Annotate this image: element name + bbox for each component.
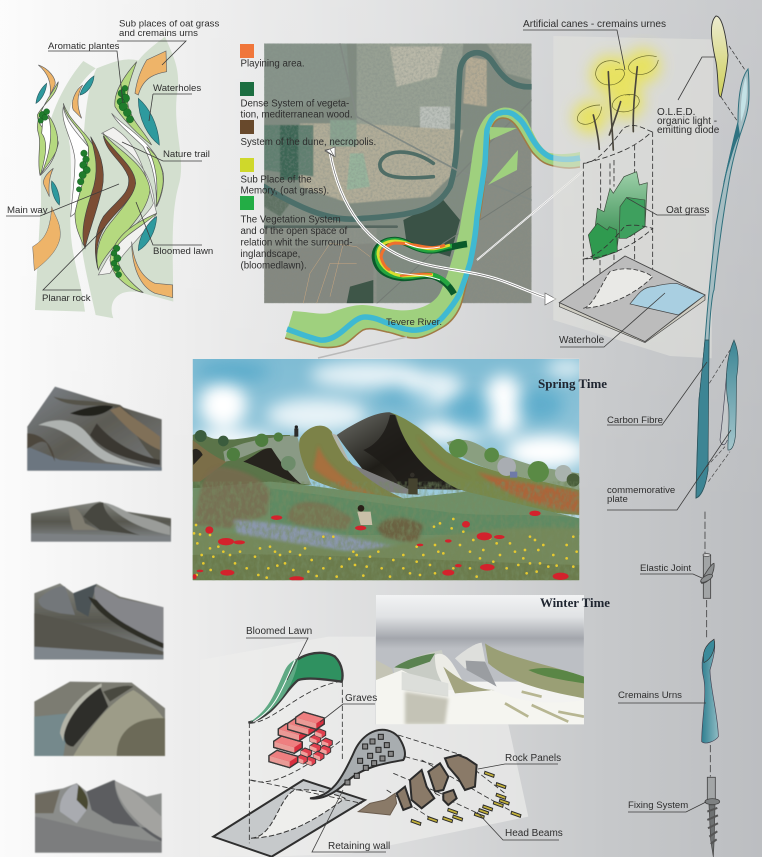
panel: spring time render <box>190 358 607 581</box>
wall leader lines <box>246 638 559 852</box>
plan label: bloomed lawn: Bloomed lawn <box>153 246 213 257</box>
legend text: relation whit the surround- <box>240 238 353 248</box>
spring scene <box>190 358 587 581</box>
detail leader lines <box>607 362 731 812</box>
legend text: Memory, (oat grass). <box>240 186 329 196</box>
legend text: The Vegetation System <box>240 214 341 226</box>
panel: plan diagram <box>6 18 219 318</box>
panel: winter time render <box>376 595 610 724</box>
cremains urn <box>702 639 718 743</box>
arrow: map to necropolis and waterhole <box>318 147 583 358</box>
plan label: main way: Main way <box>7 205 48 216</box>
OLED blade <box>711 16 728 97</box>
plan label: nature trail: Nature trail <box>163 149 210 160</box>
plan leader lines <box>6 41 202 290</box>
elastic joint <box>700 512 714 777</box>
canes drawing <box>553 36 713 358</box>
plate label: carbon fibre: Carbon Fibre <box>607 415 663 426</box>
panel: cane exploded detail <box>607 16 749 857</box>
legend text: System of the dune, necropolis. <box>240 137 376 148</box>
cane label: waterhole: Waterhole <box>559 335 605 346</box>
legend text: Sub Place of the <box>240 174 312 186</box>
cane label: OLED: O.L.E.D. <box>657 107 695 118</box>
model photo 1 <box>27 387 162 471</box>
commemorative plate <box>707 340 738 482</box>
model photo 5 <box>35 780 162 853</box>
legend text: inglandscape, <box>240 249 300 260</box>
model photo 4 <box>34 682 165 756</box>
cane label: OLED: organic light - <box>657 116 717 127</box>
panel: site map <box>240 43 583 358</box>
legend text: Dense System of vegeta- <box>240 98 349 110</box>
cane label: OLED: emitting diode <box>657 125 720 136</box>
panel: model photos <box>27 387 171 853</box>
Tevere river band <box>285 107 580 348</box>
fixing label: Fixing System <box>628 800 688 811</box>
winter title: Winter Time <box>540 595 610 610</box>
legend text: tion, mediterranean wood. <box>240 110 353 120</box>
spring title: Spring Time <box>538 376 607 391</box>
meander of planted bands <box>375 240 467 294</box>
fixing system <box>705 777 720 857</box>
urn label: Cremains Urns <box>618 690 682 701</box>
plan drawing <box>33 37 181 318</box>
winter scene <box>376 595 584 724</box>
main stem <box>696 46 749 498</box>
wall drawing <box>200 637 528 857</box>
wall label: rock panels: Rock Panels <box>505 753 561 764</box>
plate label: commemorative plate: plate <box>607 494 628 505</box>
joint label: Elastic Joint <box>640 563 692 574</box>
aerial photo <box>264 43 532 307</box>
map legend <box>240 44 376 272</box>
cane label: oat grass: Oat grass <box>666 205 709 216</box>
plan label: waterholes: Waterholes <box>153 83 201 94</box>
legend text: and of the open space of <box>240 226 347 237</box>
legend text: (bloomedlawn). <box>240 260 307 272</box>
panel: artificial canes diagram <box>523 19 722 358</box>
cane label: artificial canes: Artificial canes - cremains urnes <box>523 19 666 30</box>
model photo 3 <box>34 583 163 659</box>
plan label: sub places: Sub places of oat grass <box>119 18 219 30</box>
plan label: aromatic plants: Aromatic plantes <box>48 41 120 52</box>
panel: retaining wall diagram <box>200 626 563 857</box>
model photo 2 <box>31 502 171 542</box>
wall label: retaining wall: Retaining wall <box>328 841 390 852</box>
plan label: planar rock: Planar rock <box>42 293 91 304</box>
wall label: graves: Graves <box>345 693 377 704</box>
legend text: Playining area. <box>240 58 305 70</box>
plate label: commemorative plate: commemorative <box>607 485 675 496</box>
wall label: bloomed lawn: Bloomed Lawn <box>246 626 312 637</box>
wall label: head beams: Head Beams <box>505 828 563 839</box>
plan label: sub places: and cremains urns <box>119 28 198 39</box>
river label: Tevere River. <box>386 317 442 328</box>
cane leader lines <box>523 30 722 347</box>
